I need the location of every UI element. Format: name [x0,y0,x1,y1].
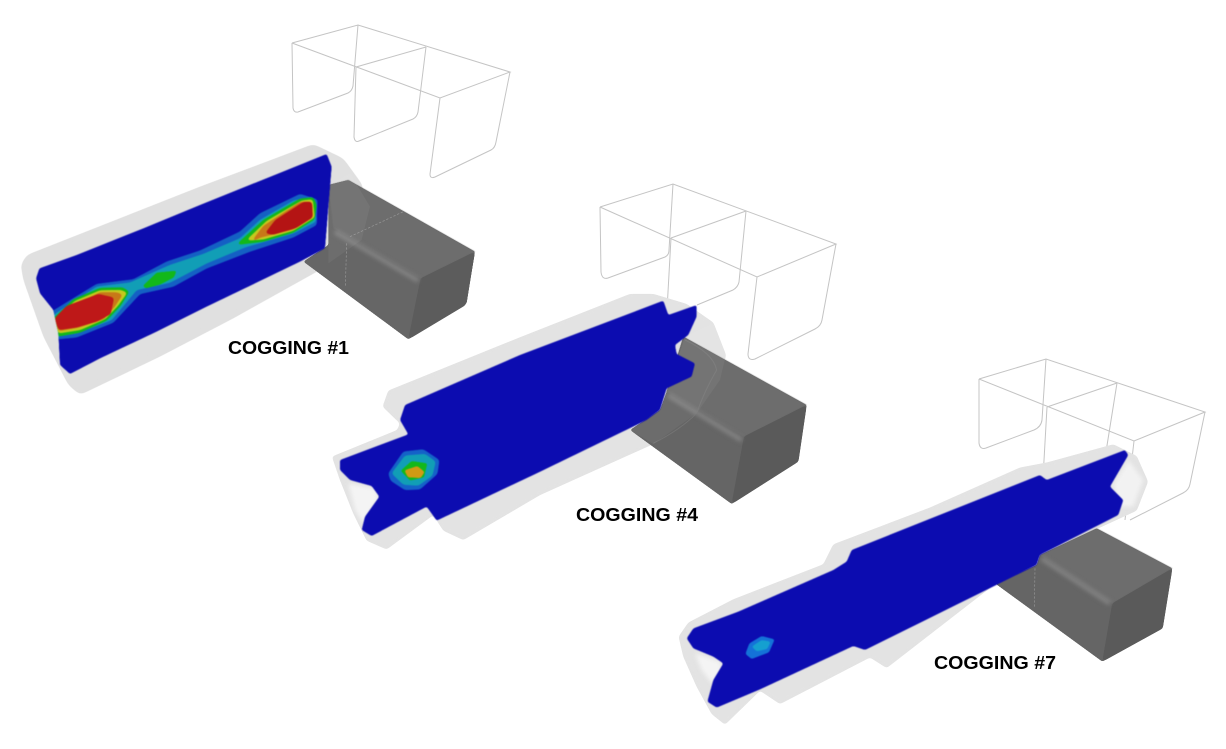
lower support block 7 [995,528,1172,662]
ghost inner highlight 7 [695,653,722,683]
workpiece 7 [679,444,1172,725]
translucent ghost 4 [332,294,726,549]
strain contour surface 4 [340,301,697,536]
die wireframe 7 [979,359,1205,520]
strain contour surface 1 [36,154,332,374]
translucent ghost 1 [21,144,365,395]
strain contour surface 7 [687,450,1128,708]
lower support block 4 [630,323,807,504]
label: cogging 4: COGGING #4 [576,505,698,525]
translucent ghost 7 [679,444,1148,725]
workpiece 1 [21,144,475,395]
scene: cogging 4 [332,184,836,549]
scene: cogging 1 [21,25,510,395]
scene: cogging 7 [679,359,1205,725]
die wireframe 4 [600,184,836,359]
lower support block 1 [303,173,475,339]
die wireframe 1 [292,25,510,178]
label: cogging 7: COGGING #7 [934,653,1056,673]
ghost inner highlight 4 [348,483,378,523]
workpiece 4 [332,294,807,549]
label: cogging 1: COGGING #1 [228,338,349,358]
